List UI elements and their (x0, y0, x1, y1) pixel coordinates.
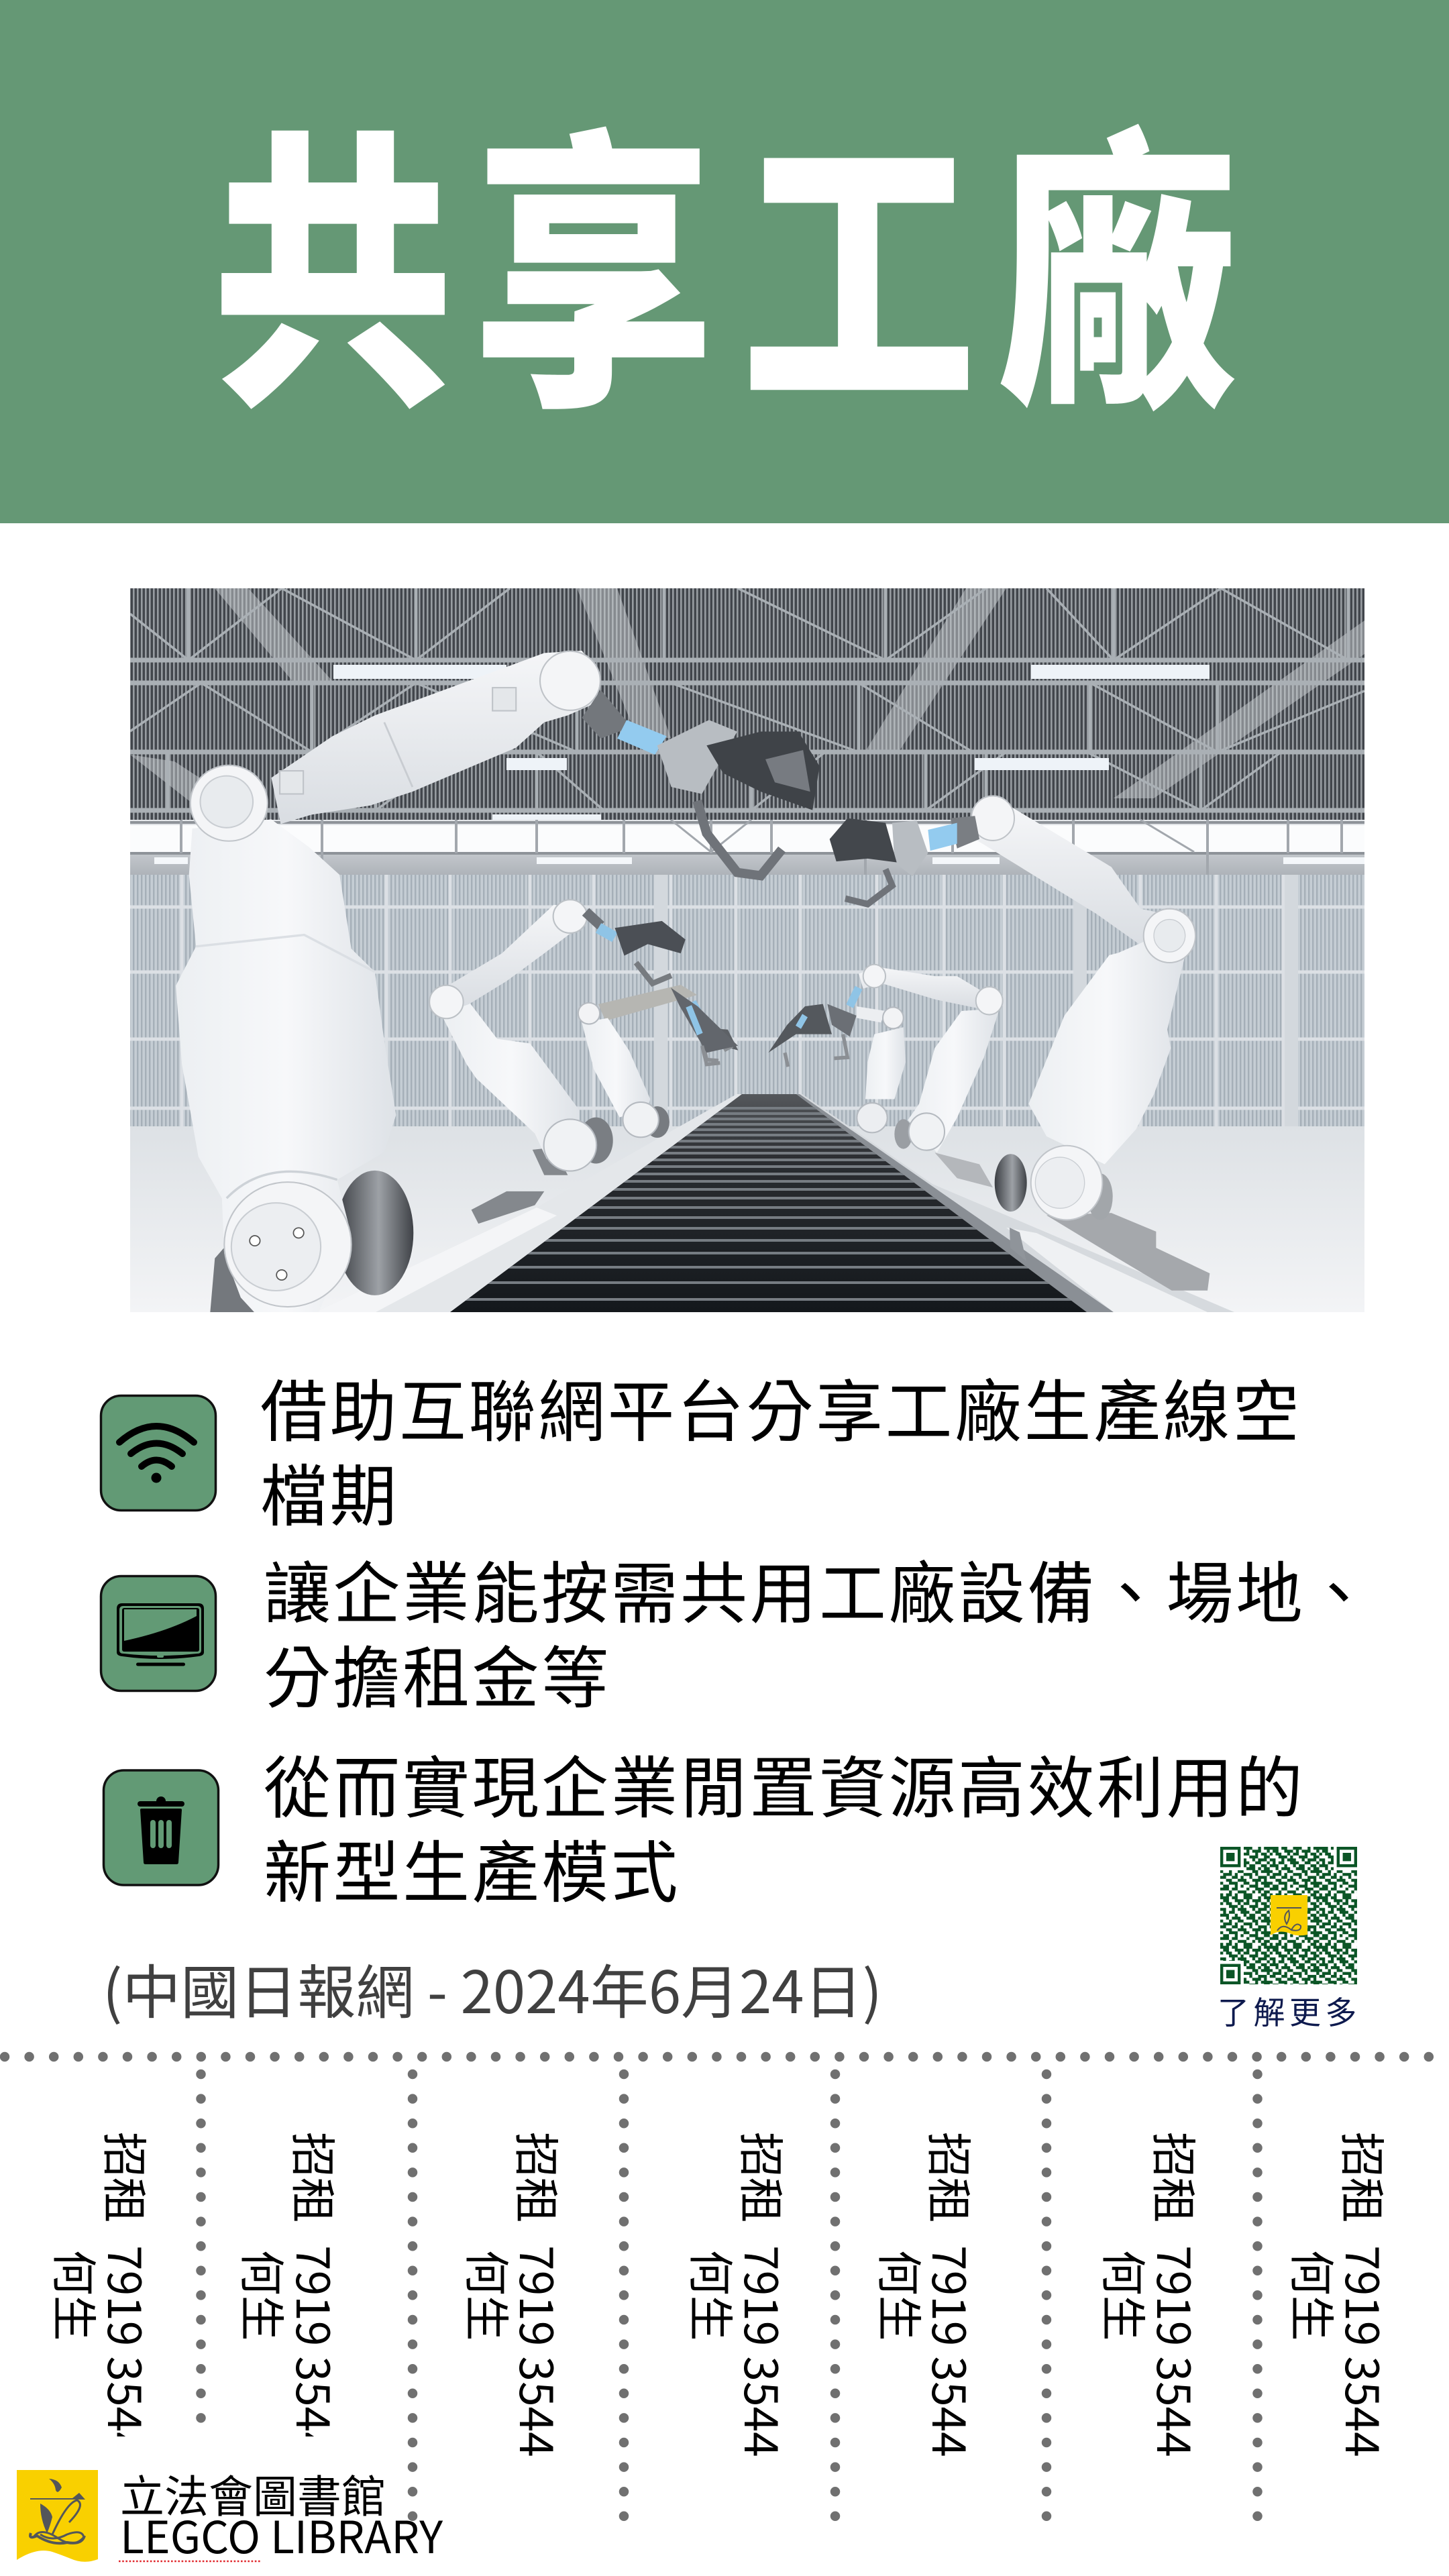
ceiling lights (333, 665, 1210, 824)
tear-off tab 2: 招租 (283, 2132, 349, 2222)
wall (130, 875, 1364, 1127)
floor (130, 1126, 1364, 1312)
tear-off tab 4: 招租 (731, 2132, 797, 2222)
tear-off tab 3: 7919 3544 (506, 2245, 572, 2457)
tear-off tab 1: 招租 (95, 2132, 160, 2222)
big right robot arm (971, 796, 1210, 1291)
bullet text 3: 從而實現企業閒置資源高效利用的 (264, 1734, 1305, 1831)
tear-off tab 4: 何生 (681, 2250, 747, 2341)
tear-off tab 1 (54, 2133, 146, 2436)
bullet text 1 (260, 1358, 1301, 1540)
tear-off tab 7 (1282, 2132, 1398, 2457)
mid left robot arm (429, 900, 686, 1224)
mid right robot arm (859, 965, 1003, 1187)
right inner grippers (671, 987, 859, 1067)
tear-off tab 3 (457, 2132, 572, 2457)
bullet icon: monitor (101, 1576, 216, 1690)
tear-off tab 7: 7919 3544 (1332, 2245, 1398, 2457)
library name: LEGCO LIBRARY (120, 2502, 443, 2567)
title (211, 38, 1239, 467)
tear-off tab 2 (241, 2133, 335, 2436)
right robots traced in crop coordinates (671, 796, 1210, 1291)
source line: (中國日報網 - 2024年6月24日) (103, 1946, 882, 2031)
library name (120, 2461, 443, 2567)
tear-off tab 2: 7919 3544 (283, 2245, 349, 2457)
tear-off tab 5: 何生 (869, 2250, 935, 2341)
tear-off tab 1: 何生 (44, 2250, 110, 2341)
small right robot arm (857, 1006, 906, 1132)
title: 享 (472, 40, 715, 467)
bullet text 1: 檔期 (260, 1442, 399, 1540)
ceiling mesh and trusses (130, 588, 1364, 820)
bullet text 1: 借助互聯網平台分享工廠生產線空 (260, 1358, 1301, 1455)
tear-off tab 6: 7919 3544 (1144, 2245, 1210, 2457)
clerestory window band (130, 820, 1364, 875)
tear-off tab 5: 招租 (919, 2132, 985, 2222)
bullet icon: wifi (101, 1395, 216, 1511)
big left robot arm (176, 651, 600, 1313)
left robots traced in crop coordinates (176, 651, 820, 1313)
big left gripper (582, 690, 820, 875)
small left robot arm (578, 985, 738, 1138)
tear-off tab 1: 7919 3544 (95, 2245, 160, 2457)
tear-off tab 3: 招租 (506, 2132, 572, 2222)
icon: Legislative Council Library logo (17, 2470, 98, 2562)
title: 共 (211, 40, 454, 467)
spell-check underline (119, 2561, 260, 2562)
tear-off tab 5 (869, 2132, 985, 2457)
photo: robot arms on a conveyor line (130, 588, 1364, 1313)
title: 工 (741, 38, 977, 466)
QR code (1220, 1847, 1357, 1984)
bullet text 2: 分擔租金等 (264, 1624, 610, 1721)
QR caption: 了解更多 (1218, 1987, 1361, 2033)
bullet text 3: 新型生產模式 (264, 1819, 680, 1916)
tear-off tab 7: 何生 (1282, 2250, 1348, 2341)
tear-off dotted lines (5, 2057, 1433, 2517)
tear-off tab 6 (1093, 2132, 1210, 2457)
tear-off tab 3: 何生 (457, 2250, 523, 2341)
bullet icon: trash bin (103, 1770, 219, 1885)
tear-off tab 6: 招租 (1144, 2132, 1210, 2222)
tear-off tab 2: 何生 (232, 2250, 298, 2341)
bullet text 3 (264, 1734, 1305, 1916)
header band (0, 0, 1449, 523)
big right gripper (830, 816, 979, 904)
conveyor side rails (315, 1094, 1234, 1312)
tear-off tab 6: 何生 (1093, 2250, 1159, 2341)
conveyor belt (450, 1094, 1087, 1312)
tear-off tab 4: 7919 3544 (731, 2245, 797, 2457)
bullet text 2: 讓企業能按需共用工廠設備、場地、 (264, 1540, 1375, 1637)
tear-off tab 7: 招租 (1332, 2132, 1398, 2222)
library name: 立法會圖書館 (120, 2461, 386, 2526)
tear-off tab 4 (681, 2132, 797, 2457)
bullet text 2 (264, 1540, 1375, 1721)
tear-off tab 5: 7919 3544 (919, 2245, 985, 2457)
title: 廠 (996, 40, 1239, 467)
